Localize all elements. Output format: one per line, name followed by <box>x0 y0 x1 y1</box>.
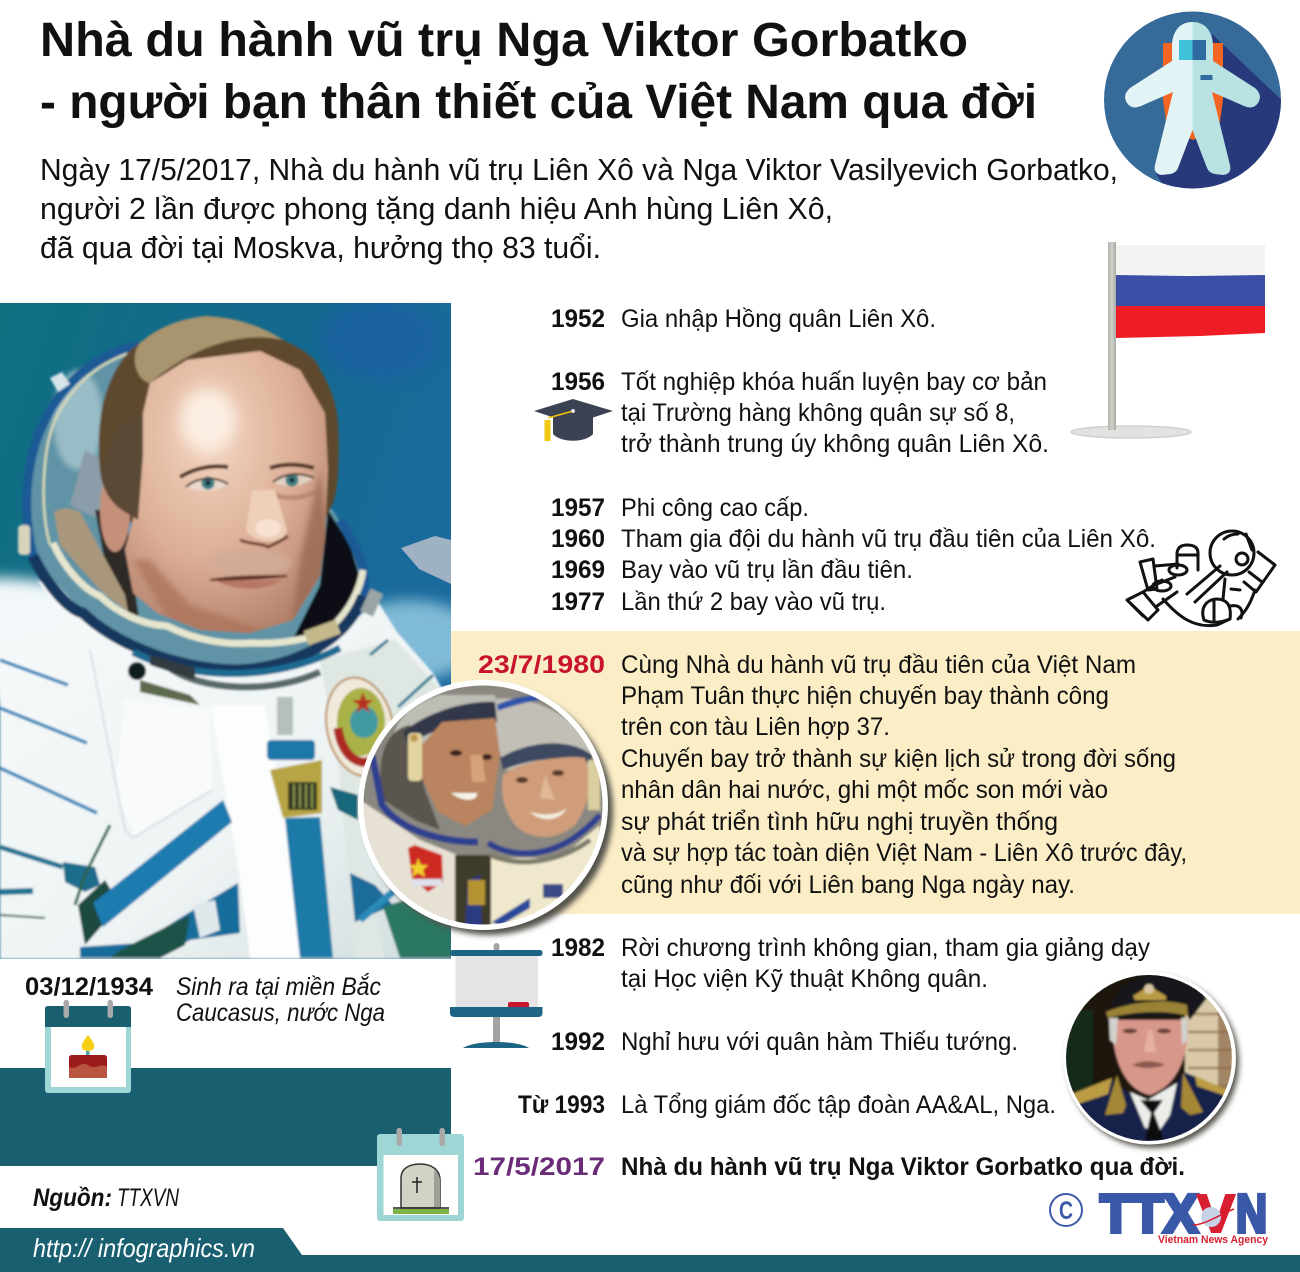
spacesuit <box>0 580 451 959</box>
entry 23/7/1980: Cùng Nhà du hành vũ trụ đầu tiên của Việt Nam <box>621 651 1136 679</box>
helmet <box>18 345 383 687</box>
source credit: Nguồn: <box>33 1184 112 1212</box>
icon: Russian flag <box>1071 242 1265 438</box>
entry 1982: tại Học viện Kỹ thuật Không quân. <box>621 965 988 993</box>
source credit: TTXVN <box>117 1184 180 1212</box>
icon: tombstone calendar <box>377 1128 464 1221</box>
title <box>40 14 1037 129</box>
intro text: người 2 lần được phong tặng danh hiệu Anh hùng Liên Xô, <box>40 192 833 226</box>
entry 1982: 1982 <box>551 934 605 962</box>
entry 1977: Lần thứ 2 bay vào vũ trụ. <box>621 588 886 616</box>
soviet emblem patch <box>324 675 394 778</box>
logo: TTXVN: Vietnam News Agency <box>1158 1234 1269 1246</box>
source credit <box>33 1184 180 1212</box>
round photo: Gorbatko and Pham Tuan <box>358 680 613 935</box>
entry 1982 <box>551 934 1150 993</box>
entry 23/7/1980: Chuyến bay trở thành sự kiện lịch sử trong đời sống <box>621 745 1176 773</box>
head and face <box>99 316 339 640</box>
entry 1969: 1969 <box>551 556 605 584</box>
entry 1960: 1960 <box>551 525 605 553</box>
entry 1982: Rời chương trình không gian, tham gia giảng dạy <box>621 934 1150 962</box>
entry 23/7/1980: nhân dân hai nước, ghi một mốc son mới vào <box>621 776 1108 804</box>
birth date <box>25 972 385 1027</box>
icon: astronaut line drawing <box>1127 531 1275 626</box>
logo: TTXVN: C <box>1059 1197 1073 1225</box>
entry 1956: tại Trường hàng không quân sự số 8, <box>621 399 1015 427</box>
footer link: http:// infographics.vn <box>33 1233 255 1263</box>
entry from 1993: Từ 1993 <box>518 1091 605 1119</box>
intro text: đã qua đời tại Moskva, hưởng thọ 83 tuổi. <box>40 231 601 265</box>
footer bar <box>0 1228 1300 1272</box>
birth date: Sinh ra tại miền Bắc <box>176 972 381 1001</box>
entry 23/7/1980 <box>478 651 1187 899</box>
entry 1952: Gia nhập Hồng quân Liên Xô. <box>621 305 936 333</box>
birth date: 03/12/1934 <box>25 973 153 1001</box>
entry 1992: Nghỉ hưu với quân hàm Thiếu tướng. <box>621 1028 1018 1056</box>
icon: birthday calendar <box>45 1000 131 1093</box>
icon: graduation cap <box>534 399 613 441</box>
entry 1957 <box>551 494 809 522</box>
entry from 1993: Là Tổng giám đốc tập đoàn AA&AL, Nga. <box>621 1091 1056 1119</box>
entry 1960: Tham gia đội du hành vũ trụ đầu tiên của Liên Xô. <box>621 525 1156 553</box>
portrait photo of Viktor Gorbatko <box>0 300 480 959</box>
entry 1969: Bay vào vũ trụ lần đầu tiên. <box>621 556 913 584</box>
entry 1952: 1952 <box>551 305 605 333</box>
title: Nhà du hành vũ trụ Nga Viktor Gorbatko <box>40 14 968 67</box>
entry 1992: 1992 <box>551 1028 605 1056</box>
title: - người bạn thân thiết của Việt Nam qua đời <box>40 76 1037 129</box>
entry 23/7/1980: sự phát triển tình hữu nghị truyền thống <box>621 808 1058 836</box>
logo: TTXVN: TTX <box>1100 1184 1198 1244</box>
icon: astronaut badge <box>1104 12 1281 188</box>
entry 23/7/1980: 23/7/1980 <box>478 651 605 679</box>
birth date: Caucasus, nước Nga <box>176 999 385 1027</box>
entry 17/5/2017: Nhà du hành vũ trụ Nga Viktor Gorbatko qua đời. <box>621 1153 1185 1181</box>
entry 1956: Tốt nghiệp khóa huấn luyện bay cơ bản <box>621 368 1047 396</box>
entry 23/7/1980: Phạm Tuân thực hiện chuyến bay thành công <box>621 682 1109 710</box>
intro text: Ngày 17/5/2017, Nhà du hành vũ trụ Liên Xô và Nga Viktor Vasilyevich Gorbatko, <box>40 153 1118 187</box>
highlight band 1980 <box>451 631 1300 914</box>
icon: presentation board <box>450 943 542 1048</box>
entry 1977: 1977 <box>551 588 605 616</box>
entry 1957: Phi công cao cấp. <box>621 494 809 522</box>
logo: TTXVN <box>1050 1184 1269 1246</box>
entry 1957: 1957 <box>551 494 605 522</box>
logo: TTXVN: N <box>1236 1184 1267 1244</box>
entry 1956: trở thành trung úy không quân Liên Xô. <box>621 430 1049 458</box>
entry 1956: 1956 <box>551 368 605 396</box>
entry 23/7/1980: cũng như đối với Liên bang Nga ngày nay. <box>621 871 1075 899</box>
entry 23/7/1980: và sự hợp tác toàn diện Việt Nam - Liên Xô trước đây, <box>621 839 1187 867</box>
intro text <box>40 153 1118 265</box>
timeline: career years <box>473 305 1187 1181</box>
entry 23/7/1980: trên con tàu Liên hợp 37. <box>621 713 890 741</box>
teal band <box>0 1068 451 1166</box>
entry 1956 <box>551 368 1049 458</box>
round photo: Gorbatko in uniform <box>1060 972 1240 1148</box>
entry 17/5/2017: 17/5/2017 <box>473 1153 605 1181</box>
logo: TTXVN: V <box>1197 1184 1235 1244</box>
